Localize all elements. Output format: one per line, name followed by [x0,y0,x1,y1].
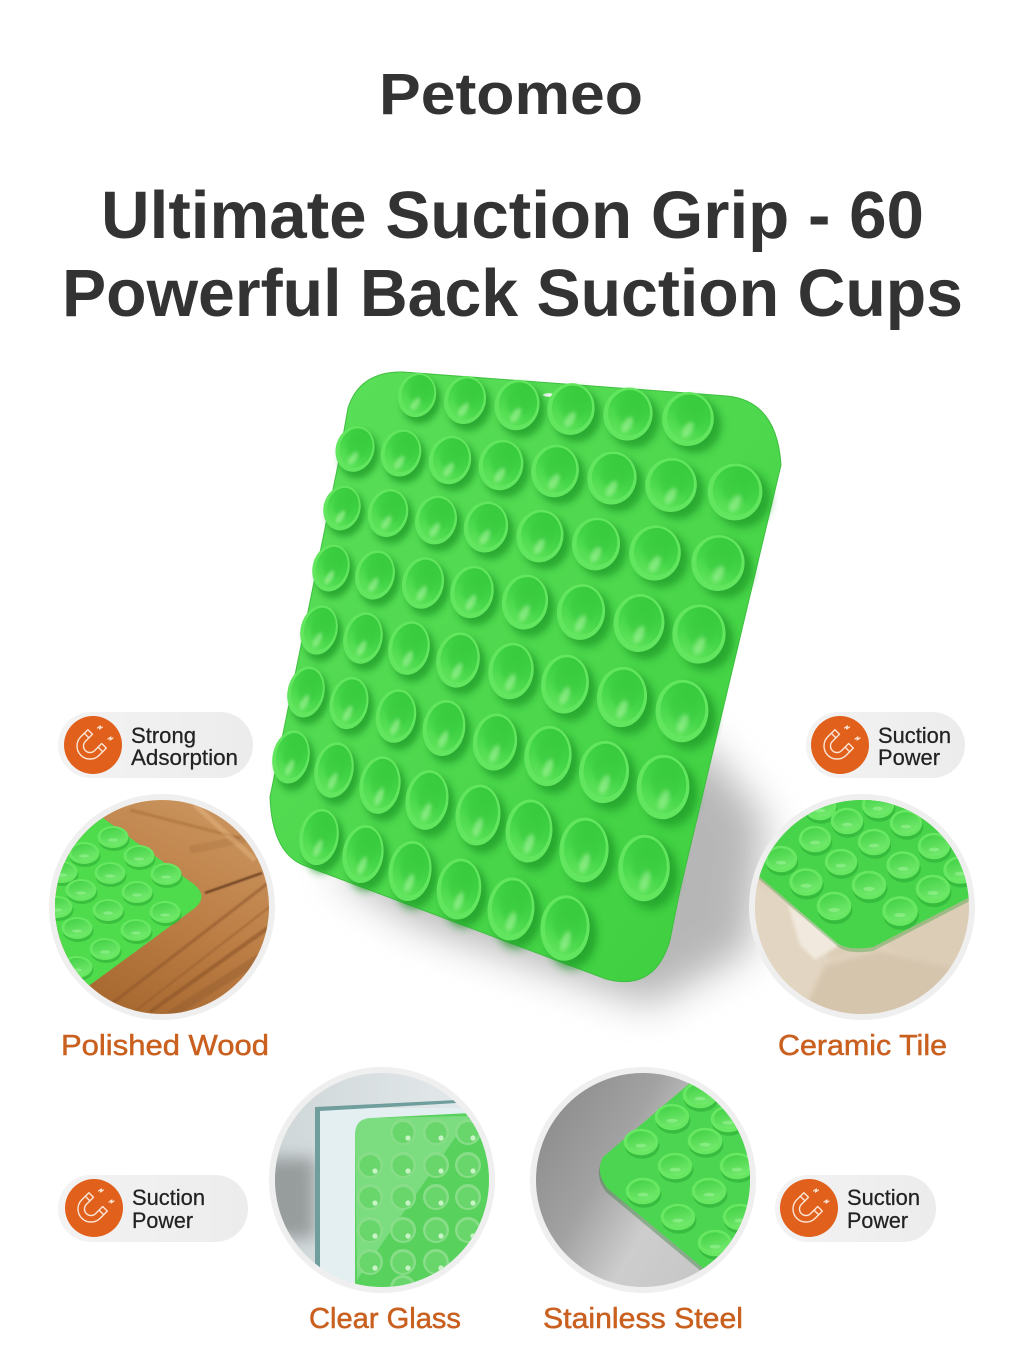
badge: Strong Adsorption [58,712,253,778]
heading line 1: Ultimate Suction Grip - 60 [101,178,924,253]
photo circle: mat on clear glass [260,1067,495,1301]
photo circle: mat on polished wood [40,790,275,1020]
badge: Suction Power top right [806,712,965,778]
label: Polished Wood: Polished Wood [61,1030,269,1062]
badge: Suction Power bottom right: Suction [847,1185,920,1210]
brand name: Petomeo: Petomeo [379,62,643,127]
badge: Suction Power bottom left: Power [132,1208,193,1233]
badge: Suction Power bottom right [775,1175,936,1242]
badge: Suction Power bottom left [58,1175,248,1242]
suction cups [266,368,774,970]
photo circle: mat on stainless steel [530,1067,756,1293]
badge: Strong Adsorption: Adsorption [131,745,238,770]
label: Stainless Steel: Stainless Steel [543,1303,743,1335]
product: green silicone mat with 60 suction cups [266,368,781,982]
badge: Suction Power bottom right: Power [847,1208,908,1233]
mat body [270,372,781,982]
badge: Suction Power top right: Suction [878,723,951,748]
badge: Strong Adsorption: Strong [131,723,196,748]
photo circle: mat on ceramic tile [749,790,978,1020]
label: Clear Glass: Clear Glass [309,1303,461,1335]
soft shadow behind product [330,740,765,1005]
label: Ceramic Tile: Ceramic Tile [778,1030,947,1062]
heading line 2: Powerful Back Suction Cups [62,256,963,331]
badge: Suction Power top right: Power [878,745,940,770]
mounting hole [543,393,555,397]
badge: Suction Power bottom left: Suction [132,1185,205,1210]
